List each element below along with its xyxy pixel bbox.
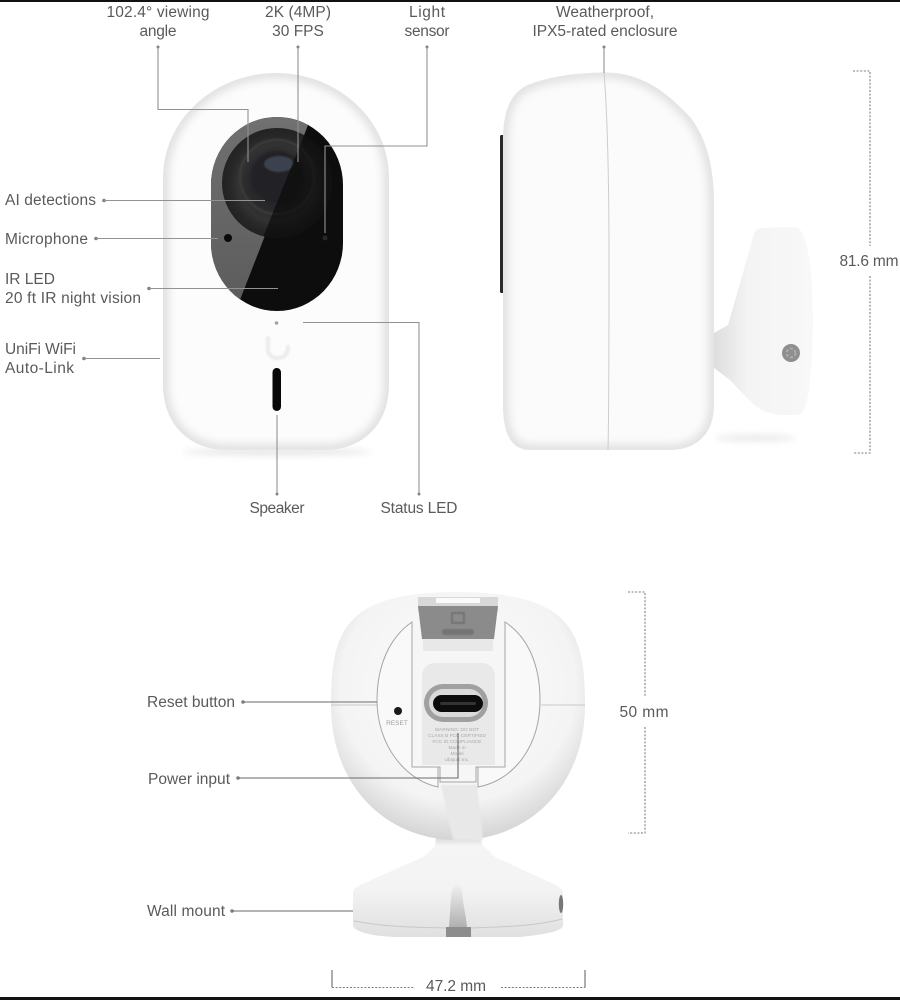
callout: wall mount: Wall mount bbox=[147, 903, 226, 920]
dimension: depth 50 mm: 50 mm bbox=[620, 704, 668, 721]
callout: WiFi: UniFi WiFi bbox=[5, 341, 76, 358]
callout: power input: Power input bbox=[148, 771, 231, 788]
fine print bbox=[428, 727, 487, 763]
shadow under front camera bbox=[182, 449, 372, 455]
fine print: Model bbox=[450, 751, 464, 757]
callout: microphone bbox=[5, 231, 218, 248]
bottom black edge bbox=[0, 997, 900, 1000]
callout: power input bbox=[148, 733, 458, 788]
cable channel strip bbox=[441, 785, 483, 840]
flap mark bbox=[452, 613, 464, 623]
logo mark bbox=[268, 338, 288, 358]
callout: AI detections: AI detections bbox=[5, 192, 96, 209]
mount screw bbox=[782, 344, 800, 362]
callout: IR LED: 20 ft IR night vision bbox=[5, 290, 141, 307]
dark front strip bbox=[500, 135, 505, 293]
seam bbox=[604, 72, 609, 450]
side camera body bbox=[500, 70, 716, 452]
speaker slot bbox=[272, 368, 281, 411]
cable notch bbox=[446, 927, 471, 937]
callout: resolution: 30 FPS bbox=[272, 23, 324, 40]
round body bbox=[331, 592, 585, 840]
status LED bbox=[275, 321, 278, 325]
fine print: Made in bbox=[448, 745, 466, 751]
callout: speaker bbox=[250, 415, 304, 517]
dimension: height 81.6 mm: 81.6 mm bbox=[840, 253, 898, 270]
reset label: RESET bbox=[386, 720, 408, 727]
callout: WiFi: Auto-Link bbox=[5, 360, 74, 377]
callout: viewing angle bbox=[106, 4, 248, 162]
visor reflection bbox=[211, 117, 308, 300]
callout: light sensor: Light bbox=[409, 4, 446, 21]
callout: viewing angle: angle bbox=[140, 23, 176, 40]
light sensor hole bbox=[322, 236, 328, 240]
side view camera bbox=[500, 70, 813, 452]
callout: weatherproof: Weatherproof, bbox=[556, 4, 654, 21]
callout: weatherproof bbox=[532, 4, 678, 73]
groove bbox=[449, 882, 467, 927]
front view camera bbox=[160, 70, 392, 455]
callout: microphone: Microphone bbox=[5, 231, 88, 248]
microphone hole bbox=[224, 234, 232, 242]
USB-C port bbox=[424, 684, 488, 722]
side shadow bbox=[715, 436, 795, 440]
callout: WiFi bbox=[5, 341, 160, 377]
port panel bbox=[422, 663, 495, 765]
base mount bbox=[353, 830, 563, 937]
flap bbox=[418, 597, 498, 651]
callout: status LED: Status LED bbox=[380, 500, 458, 517]
callout: resolution: 2K (4MP) bbox=[265, 4, 331, 21]
callout: light sensor bbox=[325, 4, 450, 233]
fine print: CLASS B FCC CERTIFIED bbox=[428, 733, 487, 739]
callout: light sensor: sensor bbox=[404, 23, 450, 40]
callout: AI detections bbox=[5, 192, 265, 209]
callout: speaker: Speaker bbox=[250, 500, 304, 517]
callout: IR LED: IR LED bbox=[5, 271, 55, 288]
callout: reset button bbox=[147, 694, 377, 711]
dimension: height 81.6 mm bbox=[840, 71, 898, 453]
wall mount side bbox=[714, 227, 813, 415]
fine print: FCC ID COMPLIANCE bbox=[432, 739, 482, 745]
callout: viewing angle: 102.4° viewing bbox=[106, 4, 210, 21]
back view camera bbox=[331, 592, 585, 937]
base seam bbox=[354, 919, 562, 928]
callout: status LED bbox=[303, 322, 458, 517]
callout: wall mount bbox=[147, 903, 353, 920]
top black edge bbox=[0, 0, 900, 2]
door outline bbox=[377, 622, 540, 787]
camera visor bbox=[211, 117, 343, 311]
fine print: WARNING: DO NOT bbox=[435, 727, 479, 733]
fine print: Ubiquiti Inc. bbox=[444, 757, 470, 763]
callout: weatherproof: IPX5-rated enclosure bbox=[532, 23, 678, 40]
side seams bbox=[331, 704, 585, 706]
dimension: width 47.2 mm: 47.2 mm bbox=[426, 978, 486, 995]
callout: reset button: Reset button bbox=[147, 694, 235, 711]
reset hole bbox=[394, 707, 402, 715]
door channel bbox=[412, 625, 505, 782]
lens bbox=[222, 128, 318, 236]
front camera body bbox=[160, 70, 392, 452]
callout: resolution bbox=[265, 4, 331, 162]
base side screw bbox=[559, 895, 563, 913]
callout: IR LED bbox=[5, 271, 278, 307]
dimension: depth 50 mm bbox=[620, 592, 668, 833]
neck shade bbox=[435, 830, 482, 846]
